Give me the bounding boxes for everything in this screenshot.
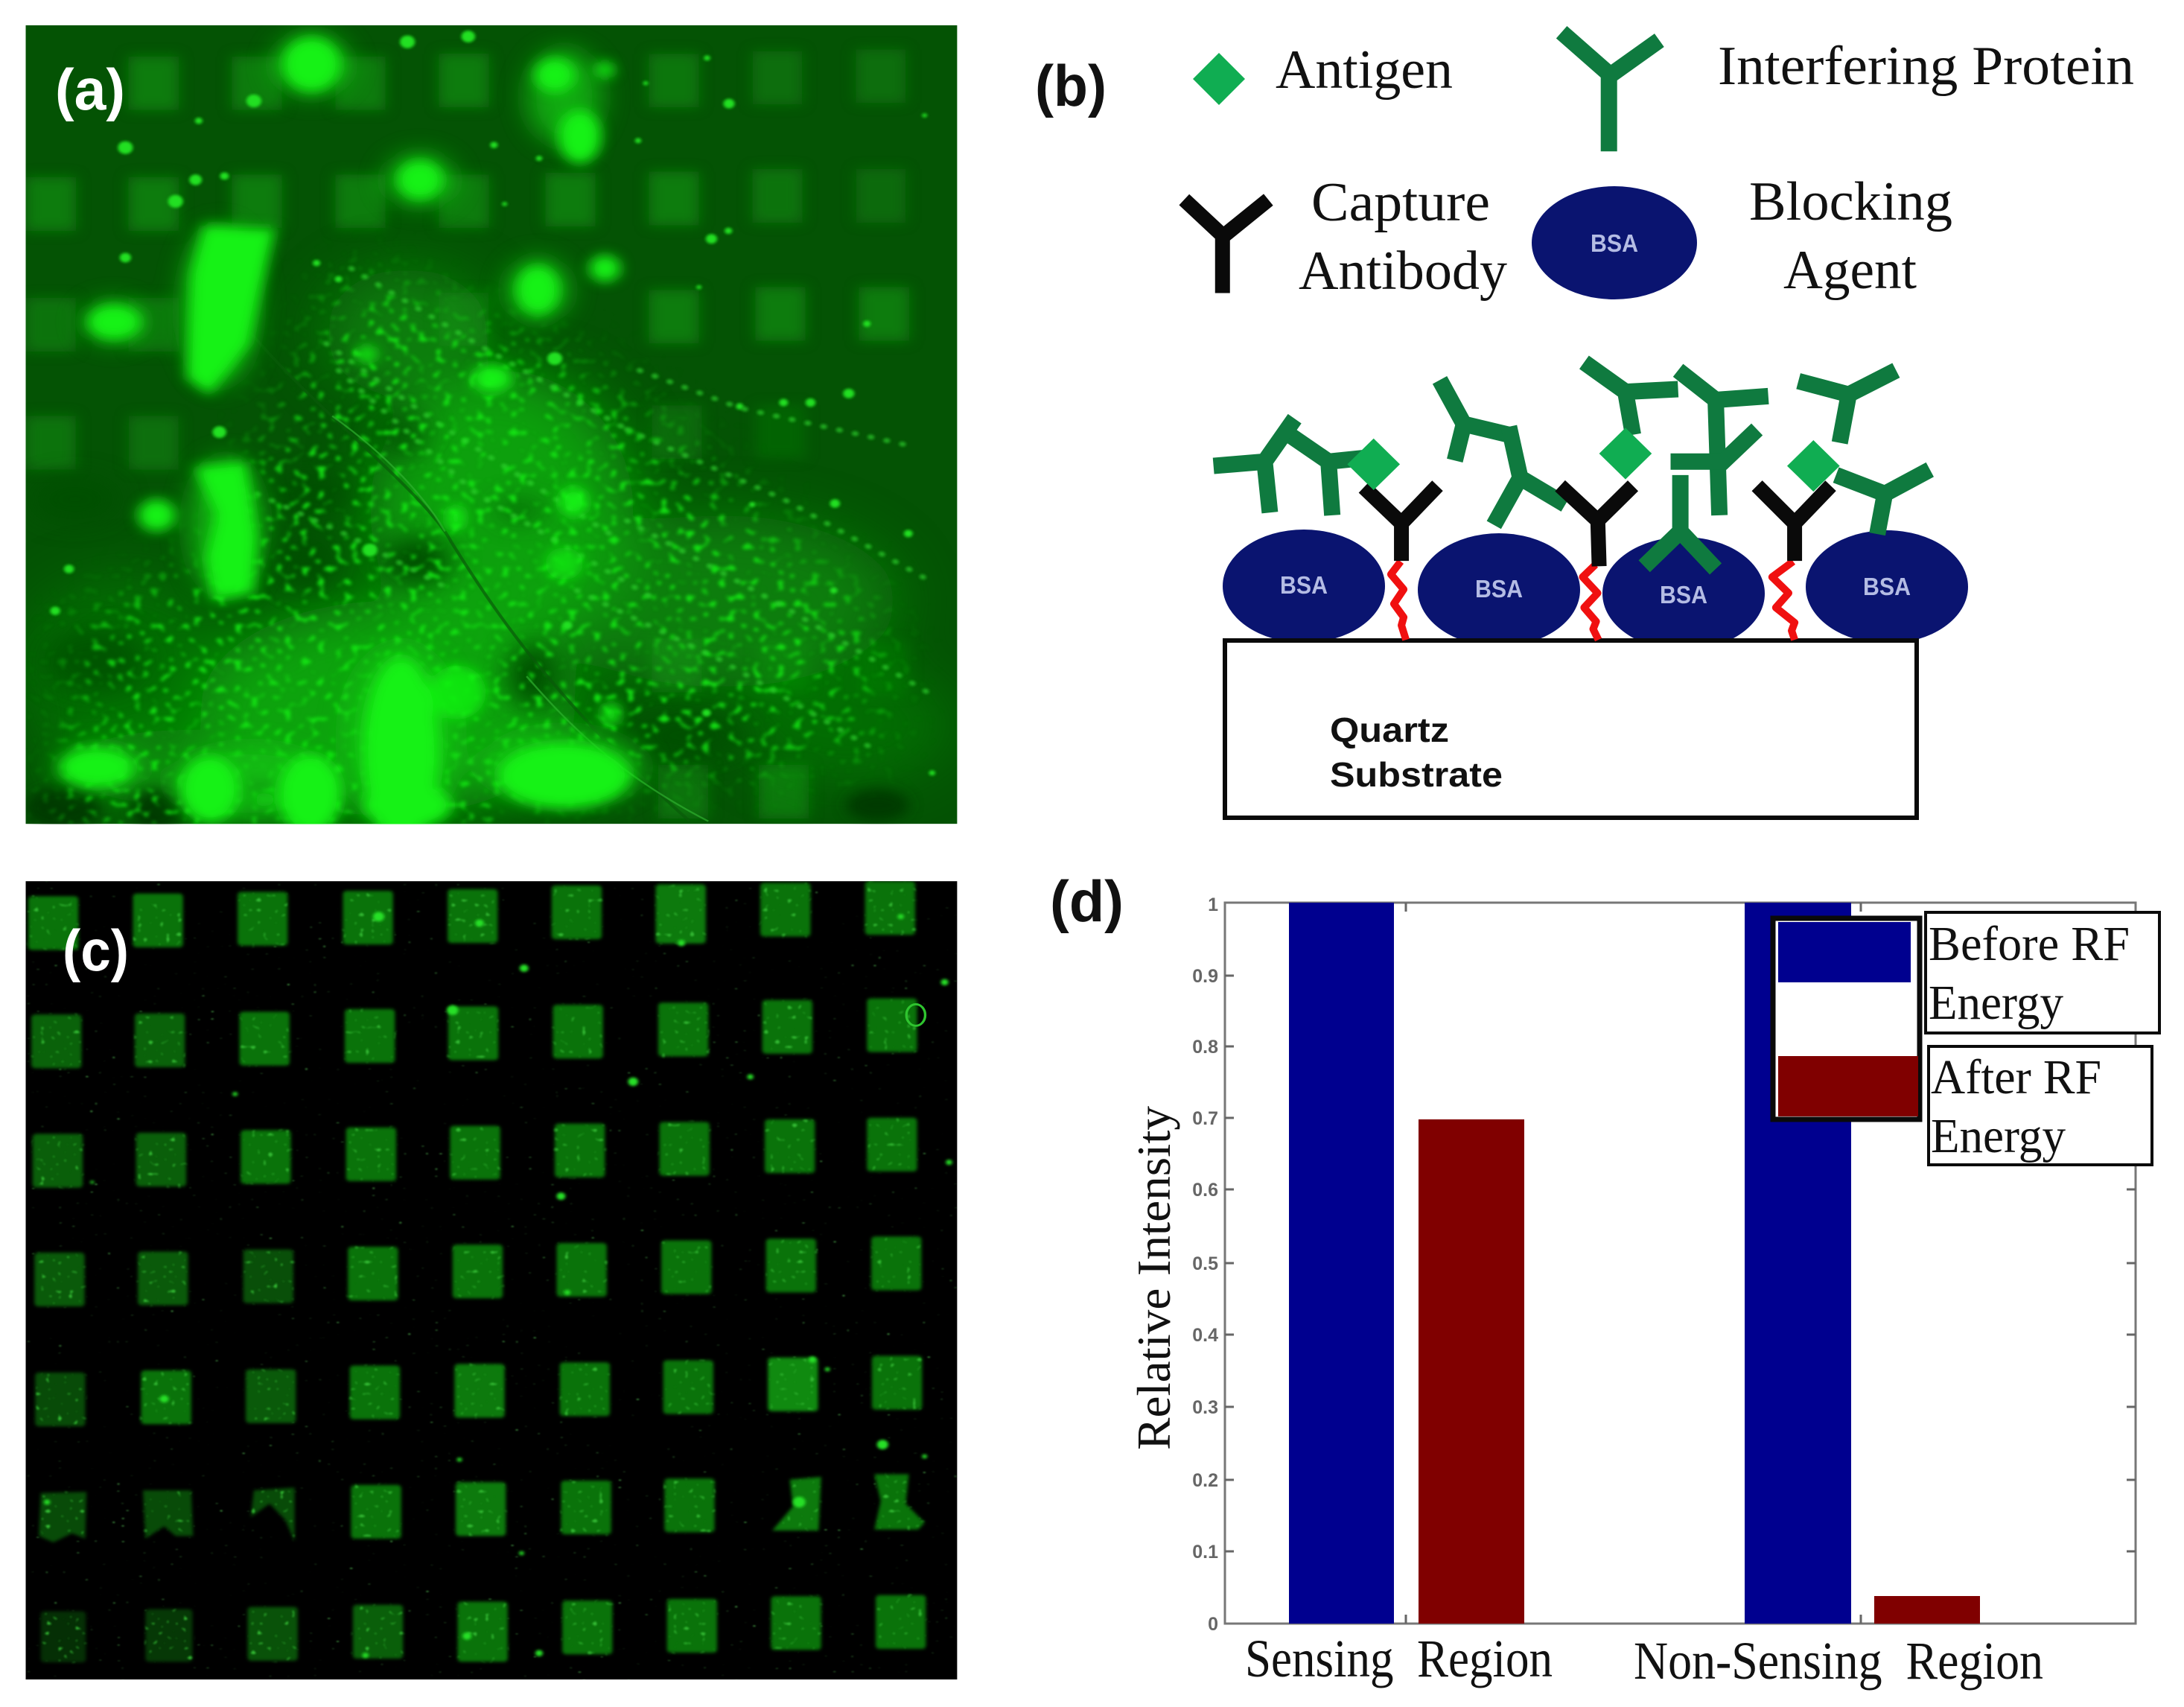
diffuse glow bbox=[19, 268, 953, 816]
marker ring bbox=[906, 1004, 925, 1026]
bars: non-sensing region bbox=[1745, 903, 1980, 1624]
y axis tick labels: 0.9 bbox=[1192, 966, 1218, 987]
legend: interfering protein icon bbox=[1561, 32, 1659, 151]
label: (b): (b) bbox=[1035, 53, 1107, 118]
legend: antigen diamond bbox=[1193, 53, 1245, 105]
y axis tick labels: 0.3 bbox=[1192, 1397, 1218, 1418]
x label: Non-Sensing Region: Non-Sensing Region bbox=[1634, 1631, 2043, 1691]
interfering proteins bbox=[1214, 362, 1930, 569]
scratches bbox=[286, 369, 687, 818]
x label: Sensing Region: Sensing Region bbox=[1245, 1629, 1553, 1688]
panel: (c) fluorescence micrograph after RF energy bbox=[26, 881, 957, 1679]
y axis tick labels: 0.6 bbox=[1192, 1180, 1218, 1201]
y axis tick labels: 0.4 bbox=[1192, 1325, 1218, 1346]
diagonal streaks bbox=[257, 268, 928, 751]
y axis tick labels: 0.2 bbox=[1192, 1470, 1218, 1491]
quartz substrate: Quartz bbox=[1330, 711, 1449, 749]
y axis tick labels: 0 bbox=[1208, 1614, 1218, 1635]
array squares bbox=[28, 881, 926, 1662]
label: (a): (a) bbox=[55, 57, 125, 122]
speckle field bbox=[63, 268, 878, 837]
legend swatches bbox=[1773, 918, 1920, 1119]
bars: sensing region bbox=[1289, 903, 1524, 1624]
BSA blocking layer: BSA bbox=[1863, 573, 1911, 600]
legend text: Antigen: Antigen bbox=[1276, 39, 1453, 101]
legend: capture antibody icon bbox=[1184, 200, 1268, 293]
y axis tick labels: 0.5 bbox=[1192, 1253, 1218, 1274]
y axis tick labels bbox=[1192, 894, 1218, 1635]
legend text: Capture Antibody bbox=[1299, 172, 1507, 302]
legend text: Blocking Agent bbox=[1749, 171, 1952, 301]
panel: (b) assay schematic bbox=[1035, 32, 2134, 818]
legend text: Capture Antibody: Capture bbox=[1311, 172, 1490, 233]
isolated bright spots bbox=[50, 31, 935, 775]
legend text box: After RF Energy: Energy bbox=[1931, 1109, 2066, 1163]
bright blobs bbox=[61, 37, 630, 845]
y axis title: Relative Intensity bbox=[1127, 1106, 1180, 1450]
y axis tick labels: 0.8 bbox=[1192, 1037, 1218, 1058]
BSA blocking layer bbox=[1223, 530, 1968, 650]
antigens bound bbox=[1347, 427, 1840, 492]
capture antibodies bbox=[1364, 486, 1831, 566]
glow halos bbox=[57, 32, 646, 827]
legend text: Capture Antibody: Antibody bbox=[1299, 241, 1507, 302]
legend text box: After RF Energy bbox=[1929, 1046, 2152, 1165]
quartz substrate: Substrate bbox=[1330, 755, 1503, 794]
BSA blocking layer: BSA bbox=[1280, 571, 1328, 599]
y axis tick labels: 0.1 bbox=[1192, 1542, 1218, 1563]
bright spots bbox=[44, 912, 952, 1658]
legend: BSA ellipse bbox=[1532, 186, 1697, 299]
BSA blocking layer: BSA bbox=[1475, 575, 1523, 603]
y axis tick labels: 0.7 bbox=[1192, 1108, 1218, 1129]
red linkers bbox=[1391, 562, 1795, 640]
legend text: Blocking Agent: Agent bbox=[1783, 240, 1917, 301]
legend text box: After RF Energy: After RF bbox=[1931, 1050, 2101, 1104]
legend text box: Before RF Energy bbox=[1926, 912, 2159, 1033]
panel: (d) bar chart relative intensity bbox=[1050, 868, 2159, 1691]
legend text box: Before RF Energy: Before RF bbox=[1929, 917, 2130, 971]
legend text: Blocking Agent: Blocking bbox=[1749, 171, 1952, 232]
legend text: Interfering Protein: Interfering Protein bbox=[1718, 36, 2134, 97]
axes and ticks bbox=[1225, 903, 2136, 1624]
panel: (a) fluorescence micrograph before RF energy bbox=[19, 25, 957, 845]
quartz substrate bbox=[1225, 640, 1917, 818]
y axis tick labels: 1 bbox=[1208, 894, 1218, 915]
legend: BSA ellipse: BSA bbox=[1591, 229, 1638, 257]
BSA blocking layer: BSA bbox=[1660, 581, 1707, 608]
background specks bbox=[26, 881, 957, 1679]
dark patches bbox=[43, 405, 570, 719]
label: (c): (c) bbox=[63, 918, 129, 983]
legend text box: Before RF Energy: Energy bbox=[1929, 976, 2063, 1030]
label: (d): (d) bbox=[1050, 868, 1124, 934]
